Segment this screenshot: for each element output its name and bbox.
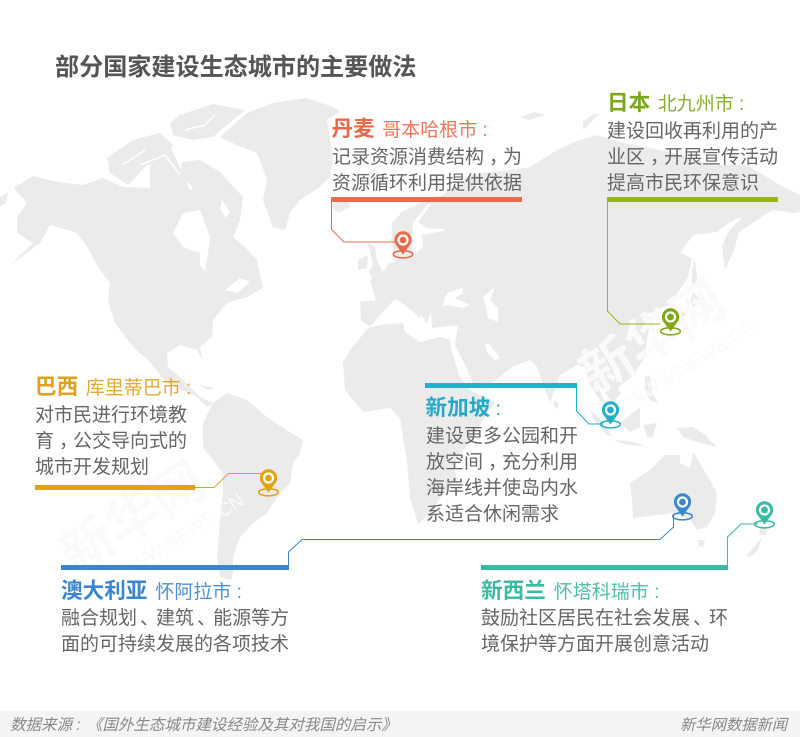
- connector: Denmark: [332, 202, 395, 242]
- heading: New Zealand: 新西兰 怀塔科瑞市 :: [481, 578, 659, 603]
- text: Australia: 融合规划、建筑、能源等方: [61, 608, 289, 628]
- connector: Japan: [608, 202, 660, 324]
- text: Singapore: 系适合休闲需求: [426, 504, 559, 525]
- text: Brazil: 对市民进行环境教: [35, 405, 187, 426]
- text: Singapore: 建设更多公园和开: [426, 426, 578, 447]
- text: Singapore: 海岸线并使岛内水: [426, 478, 578, 499]
- icon: pin Denmark: [393, 231, 413, 258]
- text: New Zealand: 境保护等方面开展创意活动: [481, 634, 709, 654]
- footer strip: [0, 711, 800, 737]
- panel: Denmark: [331, 116, 522, 202]
- heading: Japan: 日本 北九州市 :: [607, 90, 744, 115]
- bar: Denmark: [331, 197, 522, 202]
- bar: Australia: [61, 565, 289, 570]
- connector: Australia: [288, 515, 674, 565]
- text: Australia: [61, 608, 289, 654]
- heading: Denmark: 丹麦 哥本哈根市 :: [332, 116, 488, 141]
- text: Brazil: 城市开发规划: [35, 457, 149, 478]
- text: New Zealand: 鼓励社区居民在社会发展、环: [481, 608, 728, 628]
- text: Singapore: 放空间 ，充分利用: [426, 452, 578, 473]
- panel: Australia: [61, 565, 289, 654]
- watermark: Xinhuanet: WWW.NEWS.CN: [624, 316, 760, 412]
- icon: pin Japan: [661, 308, 680, 335]
- icon: pin Australia: [673, 493, 692, 520]
- text: Japan: [607, 120, 778, 194]
- connector: Brazil: [195, 474, 262, 488]
- connector: Singapore: [576, 388, 603, 424]
- bar: Japan: [607, 197, 778, 202]
- source text: 数据来源 : 《国外生态城市建设经验及其对我国的启示》: [10, 717, 397, 734]
- panel: Japan: [607, 90, 778, 202]
- panel: Brazil: [35, 374, 195, 490]
- watermark: Xinhuanet: 新华网: [50, 451, 216, 585]
- watermark: Xinhuanet: 新华网: [570, 271, 736, 405]
- text: Australia: 面的可持续发展的各项技术: [61, 634, 289, 654]
- panel: New Zealand: [481, 565, 728, 654]
- icon: pin Singapore: [601, 401, 620, 428]
- text: Japan: 业区 ，开展宣传活动: [607, 146, 778, 168]
- bar: Singapore: [425, 383, 577, 388]
- text: New Zealand: [481, 608, 728, 654]
- text: Singapore: [426, 426, 578, 525]
- text: Denmark: [332, 146, 522, 194]
- text: Brazil: [35, 404, 187, 478]
- connector: New Zealand: [728, 524, 758, 565]
- watermark: Xinhuanet: WWW.NEWS.CN: [112, 490, 248, 586]
- bar: Brazil: [35, 485, 195, 490]
- text: Japan: 建设回收再利用的产: [607, 120, 778, 142]
- heading: Singapore: 新加坡 :: [426, 394, 501, 420]
- panel: Singapore: [425, 383, 578, 525]
- icon: pin Brazil: [259, 469, 278, 496]
- title: 部分国家建设生态城市的主要做法: [55, 54, 416, 81]
- icon: pin New Zealand: [755, 501, 774, 528]
- credit: 新华网数据新闻: [680, 717, 787, 734]
- bar: New Zealand: [481, 565, 728, 570]
- text: Denmark: 资源循环利用提供依据: [332, 172, 522, 194]
- text: Japan: 提高市民环保意识: [607, 172, 759, 194]
- heading: Brazil: 巴西 库里蒂巴市 :: [35, 374, 191, 399]
- text: Brazil: 育 ，公交导向式的: [35, 431, 187, 452]
- heading: Australia: 澳大利亚 怀阿拉市 :: [61, 578, 242, 603]
- text: Denmark: 记录资源消费结构 ，为: [332, 146, 522, 168]
